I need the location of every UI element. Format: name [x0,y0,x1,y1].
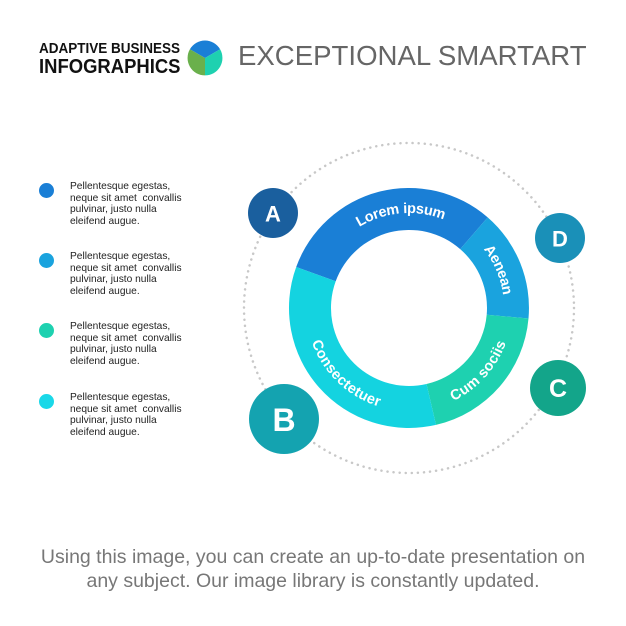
chart: ring diagram: Aenean [484,246,510,294]
text: Pellentesque egestas, [70,321,170,332]
list item 3 [39,321,182,367]
footer text [41,546,585,592]
text: neque sit amet convallis [70,193,182,204]
title: brand [39,40,180,78]
chart: ring diagram: D [552,226,568,252]
text: eleifend augue. [70,356,140,367]
segment: Cum sociis [426,315,528,425]
title: brand: ADAPTIVE BUSINESS [39,40,180,57]
chart: ring diagram: Consectetuer [313,340,382,406]
chart: ring diagram: Lorem ipsum [355,202,445,226]
chart: ring diagram: B [272,402,296,438]
text: eleifend augue. [70,427,140,438]
icon: pie logo [188,40,222,76]
chart: ring diagram: C [549,375,567,403]
text: pulvinar, justo nulla [70,204,157,215]
chart: ring diagram: Cum sociis [450,341,506,400]
segment: Lorem ipsum [296,188,488,281]
text: Pellentesque egestas, [70,181,170,192]
footer text: any subject. Our image library is constantly updated. [86,570,540,592]
text: neque sit amet convallis [70,333,182,344]
text: Pellentesque egestas, [70,392,170,403]
list item 4 [39,392,182,438]
list item 1 [39,181,182,227]
title: exceptional smartart: EXCEPTIONAL SMARTART [238,40,587,71]
text: eleifend augue. [70,216,140,227]
segment: Aenean [460,217,529,318]
chart: ring diagram: A [265,202,281,226]
title: brand: INFOGRAPHICS [39,55,180,78]
text: pulvinar, justo nulla [70,274,157,285]
footer text: Using this image, you can create an up-to-date presentation on [41,546,585,568]
text: pulvinar, justo nulla [70,344,157,355]
segment: Consectetuer [289,267,436,428]
text: neque sit amet convallis [70,263,182,274]
text: pulvinar, justo nulla [70,415,157,426]
list item 2 [39,251,182,297]
text: Pellentesque egestas, [70,251,170,262]
text: eleifend augue. [70,286,140,297]
text: neque sit amet convallis [70,404,182,415]
